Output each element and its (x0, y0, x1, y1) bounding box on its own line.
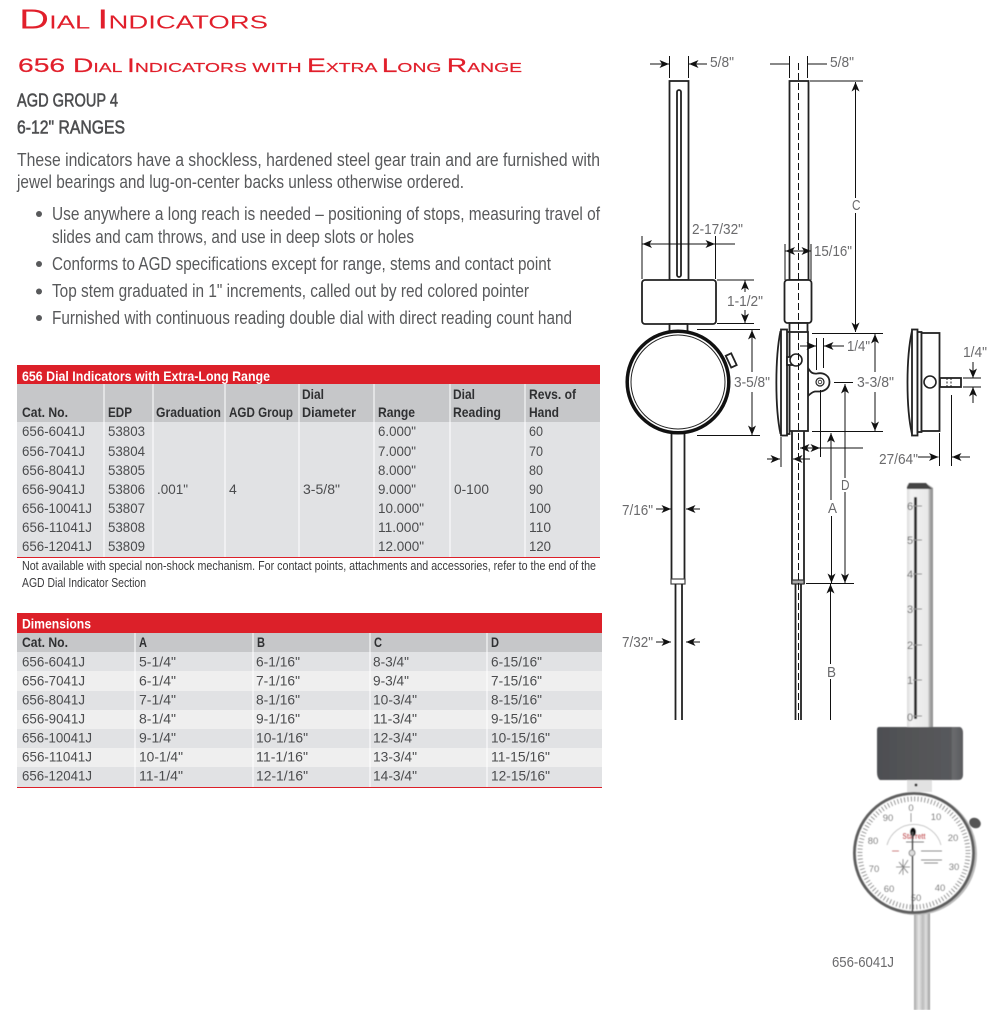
photo: dial indicator: 80 (868, 836, 878, 847)
photo: dial indicator: 20 (948, 833, 958, 844)
table: 656 dial indicators: 4 (229, 481, 237, 497)
table: 656 dial indicators: Dial (453, 386, 475, 402)
dimension: side view callouts: 15/16" (814, 243, 852, 260)
table: 656 dial indicators: 80 (529, 462, 543, 478)
subtitle: 656 D IAL INDICATORS WITH E XTRA L ONG R ANGE (18, 56, 522, 77)
table: dimensions: 5-1/4" (139, 654, 176, 670)
table: dimensions: 656-10041J (22, 730, 92, 746)
photo: dial indicator: Starrett (902, 832, 926, 841)
dimension: side view callouts: A (828, 500, 837, 517)
photo: dial indicator: 60 (884, 884, 894, 895)
photo: dial indicator: 1 (907, 675, 913, 687)
dimension: side view callouts: B (827, 664, 836, 681)
group heading: 6-12" RANGES (17, 116, 125, 138)
photo: dial indicator: 2 (907, 640, 913, 652)
photo: dial indicator: 0 (907, 712, 913, 724)
group heading: AGD GROUP 4 (17, 90, 118, 110)
table: 656 dial indicators: 53808 (108, 519, 145, 535)
feature bullet list: Top stem graduated in 1" increments, called out by red colored pointer (52, 281, 529, 301)
table: dimensions: 14-3/4" (373, 768, 417, 784)
table: dimensions: 9-3/4" (373, 672, 409, 688)
table: 656 dial indicators: 100 (529, 500, 551, 516)
table: dimensions: 656-12041J (22, 768, 92, 784)
table: 656 dial indicators: Graduation (156, 404, 221, 420)
diagram: front view (627, 81, 737, 720)
table: dimensions: 6-15/16" (491, 654, 542, 670)
photo: dial indicator: 90 (883, 813, 893, 824)
photo: dial indicator: 3 (907, 604, 913, 616)
feature bullet list: slides and cam throws, and use in deep slots or holes (52, 227, 414, 247)
table: 656 dial indicators: 656-12041J (22, 538, 92, 554)
table footnote (22, 559, 596, 590)
table: dimensions: 7-1/16" (256, 672, 300, 688)
group heading (17, 90, 125, 138)
table: 656 dial indicators: 3-5/8" (303, 481, 340, 497)
table: 656 dial indicators: 53803 (108, 423, 145, 439)
diagram: back view (908, 330, 961, 436)
table: dimensions: Cat. No. (22, 634, 68, 650)
table: 656 dial indicators: 53804 (108, 443, 145, 459)
dimension: side view callouts: 5/8" (830, 54, 854, 71)
feature bullet list: Use anywhere a long reach is needed – positioning of stops, measuring travel of (52, 204, 601, 224)
table: 656 dial indicators: 7.000" (378, 443, 416, 459)
dimension: side view callouts: C (852, 197, 861, 214)
table: dimensions: 13-3/4" (373, 748, 417, 764)
table: dimensions: 9-1/4" (139, 730, 176, 746)
table: 656 dial indicators: 90 (529, 481, 543, 497)
photo caption: 656-6041J (832, 954, 894, 971)
table: 656 dial indicators: 53809 (108, 538, 145, 554)
table: 656 dial indicators: 6.000" (378, 423, 416, 439)
table: dimensions: B (257, 634, 265, 650)
photo: dial indicator: 10 (931, 812, 941, 823)
feature bullet list (36, 204, 601, 328)
dimension: front view callouts: 7/16" (622, 502, 653, 519)
table: 656 dial indicators: 656-6041J (22, 423, 85, 439)
dimension: side view callouts: D (841, 477, 850, 494)
dimension: back view callouts: 27/64" (879, 451, 918, 468)
table footnote: AGD Dial Indicator Section (22, 576, 146, 590)
table: dimensions: 6-1/16" (256, 654, 300, 670)
intro paragraph: These indicators have a shockless, hardened steel gear train and are furnished with (17, 150, 600, 170)
dimension: front view callouts: 2-17/32" (692, 221, 743, 238)
table: 656 dial indicators: 11.000" (378, 519, 424, 535)
table: 656 dial indicators: 656-11041J (22, 519, 92, 535)
table: 656 dial indicators (17, 365, 600, 558)
photo: dial indicator (854, 483, 983, 1010)
diagram: side view (776, 63, 830, 720)
table: 656 dial indicators: 12.000" (378, 538, 424, 554)
table: dimensions: 11-3/4" (373, 710, 417, 726)
photo: dial indicator: 0 (908, 803, 914, 814)
table: 656 dial indicators: Revs. of (529, 386, 576, 402)
table: 656 dial indicators: 53807 (108, 500, 145, 516)
table: 656 dial indicators: 70 (529, 443, 543, 459)
title: D IAL INDICATORS (19, 4, 268, 34)
table: 656 dial indicators: 53805 (108, 462, 145, 478)
table: dimensions: 10-1/4" (139, 748, 183, 764)
table: 656 dial indicators: Dial (302, 386, 324, 402)
table: dimensions: 11-1/16" (256, 748, 308, 764)
table: dimensions: D (491, 634, 499, 650)
table: dimensions: 8-15/16" (491, 692, 542, 708)
table: dimensions: Dimensions (22, 616, 91, 632)
table: dimensions: 656-6041J (22, 654, 85, 670)
photo: dial indicator: 5 (907, 535, 913, 547)
table: 656 dial indicators: 0-100 (454, 481, 489, 497)
intro paragraph: jewel bearings and lug-on-center backs unless otherwise ordered. (16, 172, 464, 192)
photo: dial indicator: 40 (935, 883, 945, 894)
table: 656 dial indicators: EDP (108, 404, 132, 420)
dimension: front view callouts: 3-5/8" (734, 374, 770, 391)
table: 656 dial indicators: 8.000" (378, 462, 416, 478)
table: dimensions: 12-3/4" (373, 730, 417, 746)
dimension: back view callouts: 1/4" (963, 344, 987, 361)
table: 656 dial indicators: 656-9041J (22, 481, 85, 497)
table: 656 dial indicators: 656-10041J (22, 500, 92, 516)
table: 656 dial indicators: 53806 (108, 481, 145, 497)
dimension: side view callouts (767, 54, 894, 720)
table: dimensions: 9-15/16" (491, 710, 542, 726)
table: dimensions: 10-15/16" (491, 730, 550, 746)
photo: dial indicator: 70 (869, 864, 879, 875)
table: dimensions: 10-3/4" (373, 692, 417, 708)
dimension: side view callouts: 3-3/8" (857, 374, 894, 391)
table: 656 dial indicators: 120 (529, 538, 551, 554)
table: dimensions: 656-11041J (22, 748, 92, 764)
table: dimensions: A (139, 634, 147, 650)
table: dimensions: 10-1/16" (256, 730, 308, 746)
table: dimensions: 9-1/16" (256, 710, 300, 726)
photo: dial indicator: 30 (949, 862, 959, 873)
table: 656 dial indicators: AGD Group (229, 404, 293, 420)
table: dimensions: 8-1/16" (256, 692, 300, 708)
photo: dial indicator: 4 (907, 569, 913, 581)
dimension: front view callouts: 7/32" (622, 634, 653, 651)
photo: dial indicator: 50 (911, 893, 921, 904)
table: 656 dial indicators: 110 (529, 519, 551, 535)
table: dimensions: C (374, 634, 382, 650)
table: dimensions: 7-1/4" (139, 692, 176, 708)
table: dimensions: 656-7041J (22, 672, 85, 688)
table: 656 dial indicators: 656 Dial Indicators with Extra-Long Range (22, 368, 270, 384)
table: dimensions: 12-1/16" (256, 768, 308, 784)
table: 656 dial indicators: Diameter (302, 404, 356, 420)
table: 656 dial indicators: 60 (529, 423, 543, 439)
table: 656 dial indicators: Hand (529, 404, 559, 420)
table: 656 dial indicators: .001" (157, 481, 188, 497)
photo: dial indicator: 6 (907, 501, 913, 513)
table: dimensions: 11-1/4" (139, 768, 183, 784)
table footnote: Not available with special non-shock mechanism. For contact points, attachments and accessories, refer to the end of the (22, 559, 596, 573)
feature bullet list: Conforms to AGD specifications except for range, stems and contact point (52, 254, 551, 274)
dimension: side view callouts: 1/4" (847, 338, 870, 355)
table: 656 dial indicators: Reading (453, 404, 501, 420)
feature bullet list: Furnished with continuous reading double dial with direct reading count hand (52, 308, 572, 328)
table: dimensions: 656-9041J (22, 710, 85, 726)
table: 656 dial indicators: 9.000" (378, 481, 416, 497)
dimension: front view callouts: 1-1/2" (727, 293, 763, 310)
table: 656 dial indicators: 656-7041J (22, 443, 85, 459)
table: dimensions: 656-8041J (22, 692, 85, 708)
table: dimensions: 8-1/4" (139, 710, 176, 726)
table: 656 dial indicators: 656-8041J (22, 462, 85, 478)
table: 656 dial indicators: Cat. No. (22, 404, 68, 420)
dimension: front view callouts (622, 54, 770, 651)
table: dimensions: 7-15/16" (491, 672, 542, 688)
table: dimensions: 11-15/16" (491, 748, 550, 764)
table: dimensions: 12-15/16" (491, 768, 550, 784)
intro paragraph (16, 150, 600, 192)
table: 656 dial indicators: Range (378, 404, 415, 420)
table: dimensions: 8-3/4" (373, 654, 409, 670)
table: dimensions (17, 613, 602, 788)
dimension: front view callouts: 5/8" (710, 54, 734, 71)
table: dimensions: 6-1/4" (139, 672, 176, 688)
dimension: back view callouts (879, 344, 987, 468)
table: 656 dial indicators: 10.000" (378, 500, 424, 516)
